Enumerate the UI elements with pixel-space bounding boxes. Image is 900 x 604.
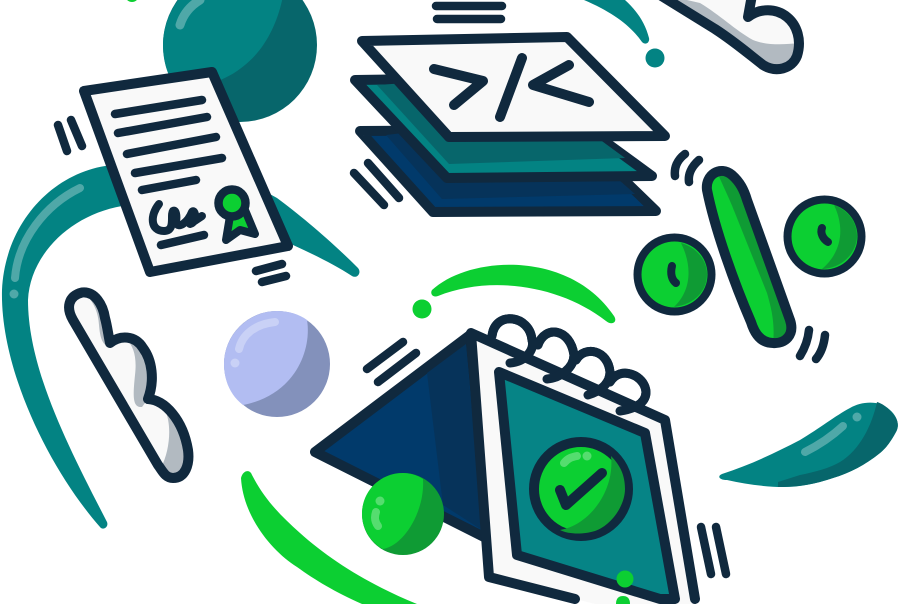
lavender sphere <box>224 311 330 417</box>
small green dot top <box>125 0 139 2</box>
cloud left <box>69 292 188 479</box>
seal <box>218 190 255 240</box>
motion lines: document <box>58 120 286 282</box>
code symbol <box>434 58 589 117</box>
check badge <box>534 442 628 536</box>
notebook <box>471 319 696 604</box>
notebook teal panel <box>499 372 675 599</box>
middle layer <box>355 78 652 178</box>
bottom layer <box>360 130 656 212</box>
signature <box>153 204 202 231</box>
binder rings front <box>492 319 646 411</box>
binder rings back <box>492 319 646 411</box>
motion lines: notebook right <box>701 527 726 574</box>
document icon <box>84 72 288 272</box>
motion lines: stack <box>354 6 502 205</box>
green swoosh top <box>412 265 615 323</box>
green dots bottom <box>616 570 634 604</box>
green sphere <box>362 473 444 555</box>
percent slash <box>707 171 791 343</box>
motion lines: notebook <box>367 342 416 382</box>
teal leaf right <box>719 402 898 487</box>
code layers stack <box>355 37 665 212</box>
motion lines: percent <box>675 154 825 359</box>
green swoosh bottom <box>241 471 417 604</box>
percent symbol <box>634 171 866 343</box>
notebook cover <box>471 333 696 604</box>
small teal swoosh and dot <box>584 0 664 68</box>
percent circle left <box>634 234 716 316</box>
percent circle right <box>784 196 866 278</box>
teal sphere <box>163 0 317 122</box>
cloud top right <box>660 0 799 71</box>
large teal swoosh <box>2 150 359 529</box>
top layer <box>362 37 665 137</box>
pyramid <box>315 335 490 540</box>
